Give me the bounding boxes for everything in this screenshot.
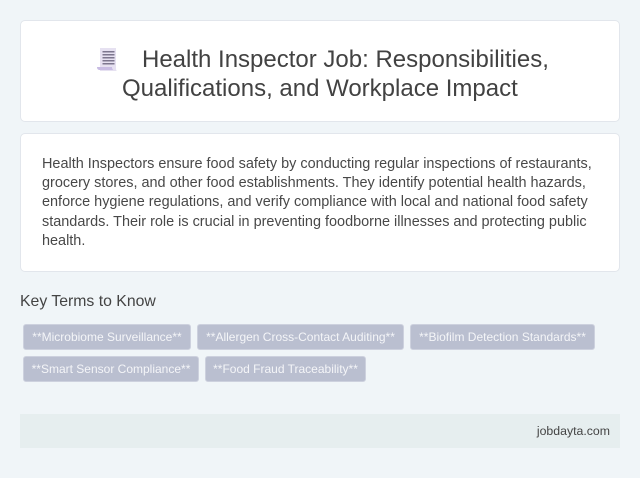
description text: enforce hygiene regulations, and verify compliance with local and national food safety: [42, 194, 588, 210]
tag: allergen auditing: **Allergen Cross-Contact Auditing**: [206, 330, 395, 344]
description text: [42, 156, 592, 249]
heading: key terms: Key Terms to Know: [20, 293, 156, 310]
tag: food fraud traceability: [205, 356, 366, 382]
description text: health.: [42, 233, 85, 249]
tag: food fraud traceability: **Food Fraud Traceability**: [213, 362, 358, 376]
tag: smart sensor compliance: **Smart Sensor Compliance**: [32, 362, 190, 376]
tag: microbiome surveillance: **Microbiome Surveillance**: [32, 330, 182, 344]
description text: grocery stores, and other food establishments. They identify potential health hazards,: [42, 175, 586, 191]
tag: biofilm detection: **Biofilm Detection Standards**: [419, 330, 586, 344]
footer source text: jobdayta.com: [537, 424, 610, 438]
icon: document scroll: [97, 48, 116, 71]
tag: allergen auditing: [197, 324, 404, 350]
panel: description card: [20, 133, 620, 272]
tag: microbiome surveillance: [23, 324, 191, 350]
description text: Health Inspectors ensure food safety by conducting regular inspections of restaurants,: [42, 156, 592, 172]
footer bar: [20, 414, 620, 448]
title line 2: Qualifications, and Workplace Impact: [122, 75, 518, 102]
title line 1: Health Inspector Job: Responsibilities,: [142, 46, 549, 73]
tag: biofilm detection: [410, 324, 595, 350]
description text: standards. Their role is crucial in preventing foodborne illnesses and protecting public: [42, 214, 587, 230]
panel: title card: [20, 20, 620, 122]
tag: smart sensor compliance: [23, 356, 199, 382]
